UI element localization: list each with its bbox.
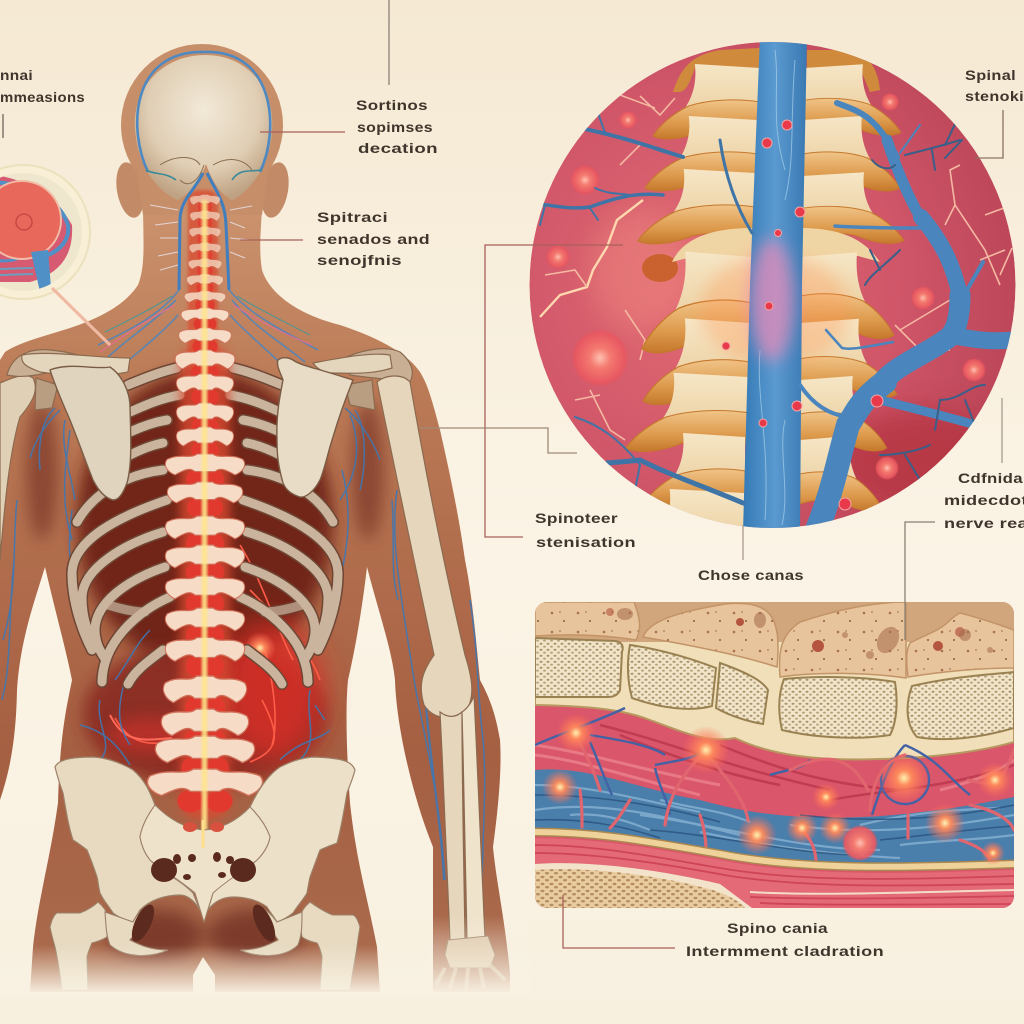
label: top right: stenoki bbox=[965, 88, 1024, 104]
left vertebrae bbox=[626, 64, 759, 526]
inset: spinal cross-section bbox=[0, 165, 90, 299]
centre left bright glow bbox=[590, 210, 690, 330]
skull fissures bbox=[160, 158, 252, 184]
label: neck: Spitraci bbox=[317, 209, 388, 225]
skull vessels bbox=[137, 52, 270, 180]
jaw connector bbox=[135, 160, 270, 215]
right dark branches bbox=[865, 120, 985, 480]
label: bottom caption: Intermment cladration bbox=[686, 943, 884, 959]
warm glow on bones bbox=[700, 255, 850, 365]
skull bbox=[135, 55, 272, 200]
neck vessels bbox=[179, 173, 229, 290]
spine vertebrae bbox=[147, 194, 263, 840]
upper muscle streaks bbox=[600, 725, 1014, 800]
orange spur bbox=[642, 254, 678, 282]
nerve crossings blue bbox=[535, 708, 970, 815]
label: top right: Spinal bbox=[965, 67, 1016, 83]
label: center: Spinoteer bbox=[535, 510, 618, 526]
panel: circular spine close-up bbox=[530, 36, 1016, 564]
forearm fade bbox=[430, 915, 530, 995]
panel: tissue cross-section bbox=[535, 602, 1014, 908]
blue nerve bundle bbox=[535, 769, 1014, 865]
top orange caps bbox=[673, 48, 880, 92]
lower right red shading bbox=[851, 402, 982, 512]
lower muscle streaks bbox=[535, 845, 1014, 905]
right scapula bbox=[277, 358, 353, 497]
tan membrane band bbox=[535, 832, 1014, 867]
vertebra tops bbox=[535, 602, 1014, 678]
cortical shell bbox=[535, 635, 1014, 759]
label: right middle: Cdfnidal bbox=[958, 470, 1024, 486]
abdomen shading bbox=[83, 643, 327, 787]
pores in bone bbox=[606, 608, 965, 652]
armpit shading bbox=[26, 400, 384, 540]
rib cavity shading bbox=[77, 370, 333, 670]
right femur and ischium bbox=[240, 901, 360, 990]
body skin silhouette bbox=[0, 200, 510, 992]
right shoulder bones bbox=[313, 349, 412, 410]
right arm bones bbox=[377, 376, 485, 940]
ear right bbox=[257, 160, 293, 220]
label: circle caption: Chose canas bbox=[698, 567, 804, 583]
right blue nerve tree bbox=[800, 103, 1016, 530]
label: skull: sopimses bbox=[357, 119, 433, 135]
label: skull: decation bbox=[358, 140, 438, 156]
white strip bbox=[750, 890, 1014, 894]
nerve crossings red bbox=[575, 735, 1014, 860]
spine glow bbox=[180, 345, 230, 820]
right ilium bbox=[208, 757, 355, 922]
head bbox=[121, 44, 283, 206]
tissue pain glows bbox=[542, 713, 1013, 865]
inset pointer bbox=[52, 288, 110, 345]
label: neck: senados and bbox=[317, 231, 430, 247]
label: top left: mmeasions bbox=[0, 89, 85, 105]
ear left bbox=[112, 160, 148, 220]
label: bottom caption: Spino cania bbox=[727, 920, 828, 936]
lightning nerves bbox=[540, 95, 1012, 440]
figure: human back with skeleton bbox=[0, 44, 530, 995]
lower cream and cancellous bone bbox=[535, 863, 752, 908]
label: center: stenisation bbox=[536, 534, 636, 550]
pain balls bbox=[546, 93, 986, 480]
label: top left: nnai bbox=[0, 67, 33, 83]
left scapula bbox=[50, 366, 131, 500]
blue fibre streaks bbox=[535, 785, 1014, 858]
lower muscle layer bbox=[535, 838, 1014, 908]
right hand bones bbox=[436, 936, 505, 990]
left shoulder bones bbox=[0, 350, 130, 560]
label: right middle: midecdot bbox=[944, 492, 1024, 508]
spinal cord bbox=[743, 36, 807, 532]
cancellous blocks bbox=[535, 638, 1014, 739]
buttock shading bbox=[107, 909, 303, 961]
left ilium bbox=[55, 757, 200, 922]
armpit and arm veins bbox=[2, 408, 485, 900]
sacrum bbox=[140, 805, 270, 922]
label: skull: Sortinos bbox=[356, 97, 428, 113]
pain glow bbox=[108, 545, 324, 762]
label: neck: senojfnis bbox=[317, 252, 402, 268]
bottom fade bbox=[0, 945, 430, 995]
left femur and ischium bbox=[50, 901, 168, 990]
neck nerve webs bbox=[98, 205, 318, 368]
label: right middle: nerve rea bbox=[944, 515, 1024, 531]
right vertebrae bbox=[800, 64, 904, 511]
red nerve nodes bbox=[722, 120, 883, 510]
neck cord bbox=[188, 190, 218, 370]
ribs bbox=[72, 368, 338, 684]
left blue branches bbox=[533, 110, 752, 503]
